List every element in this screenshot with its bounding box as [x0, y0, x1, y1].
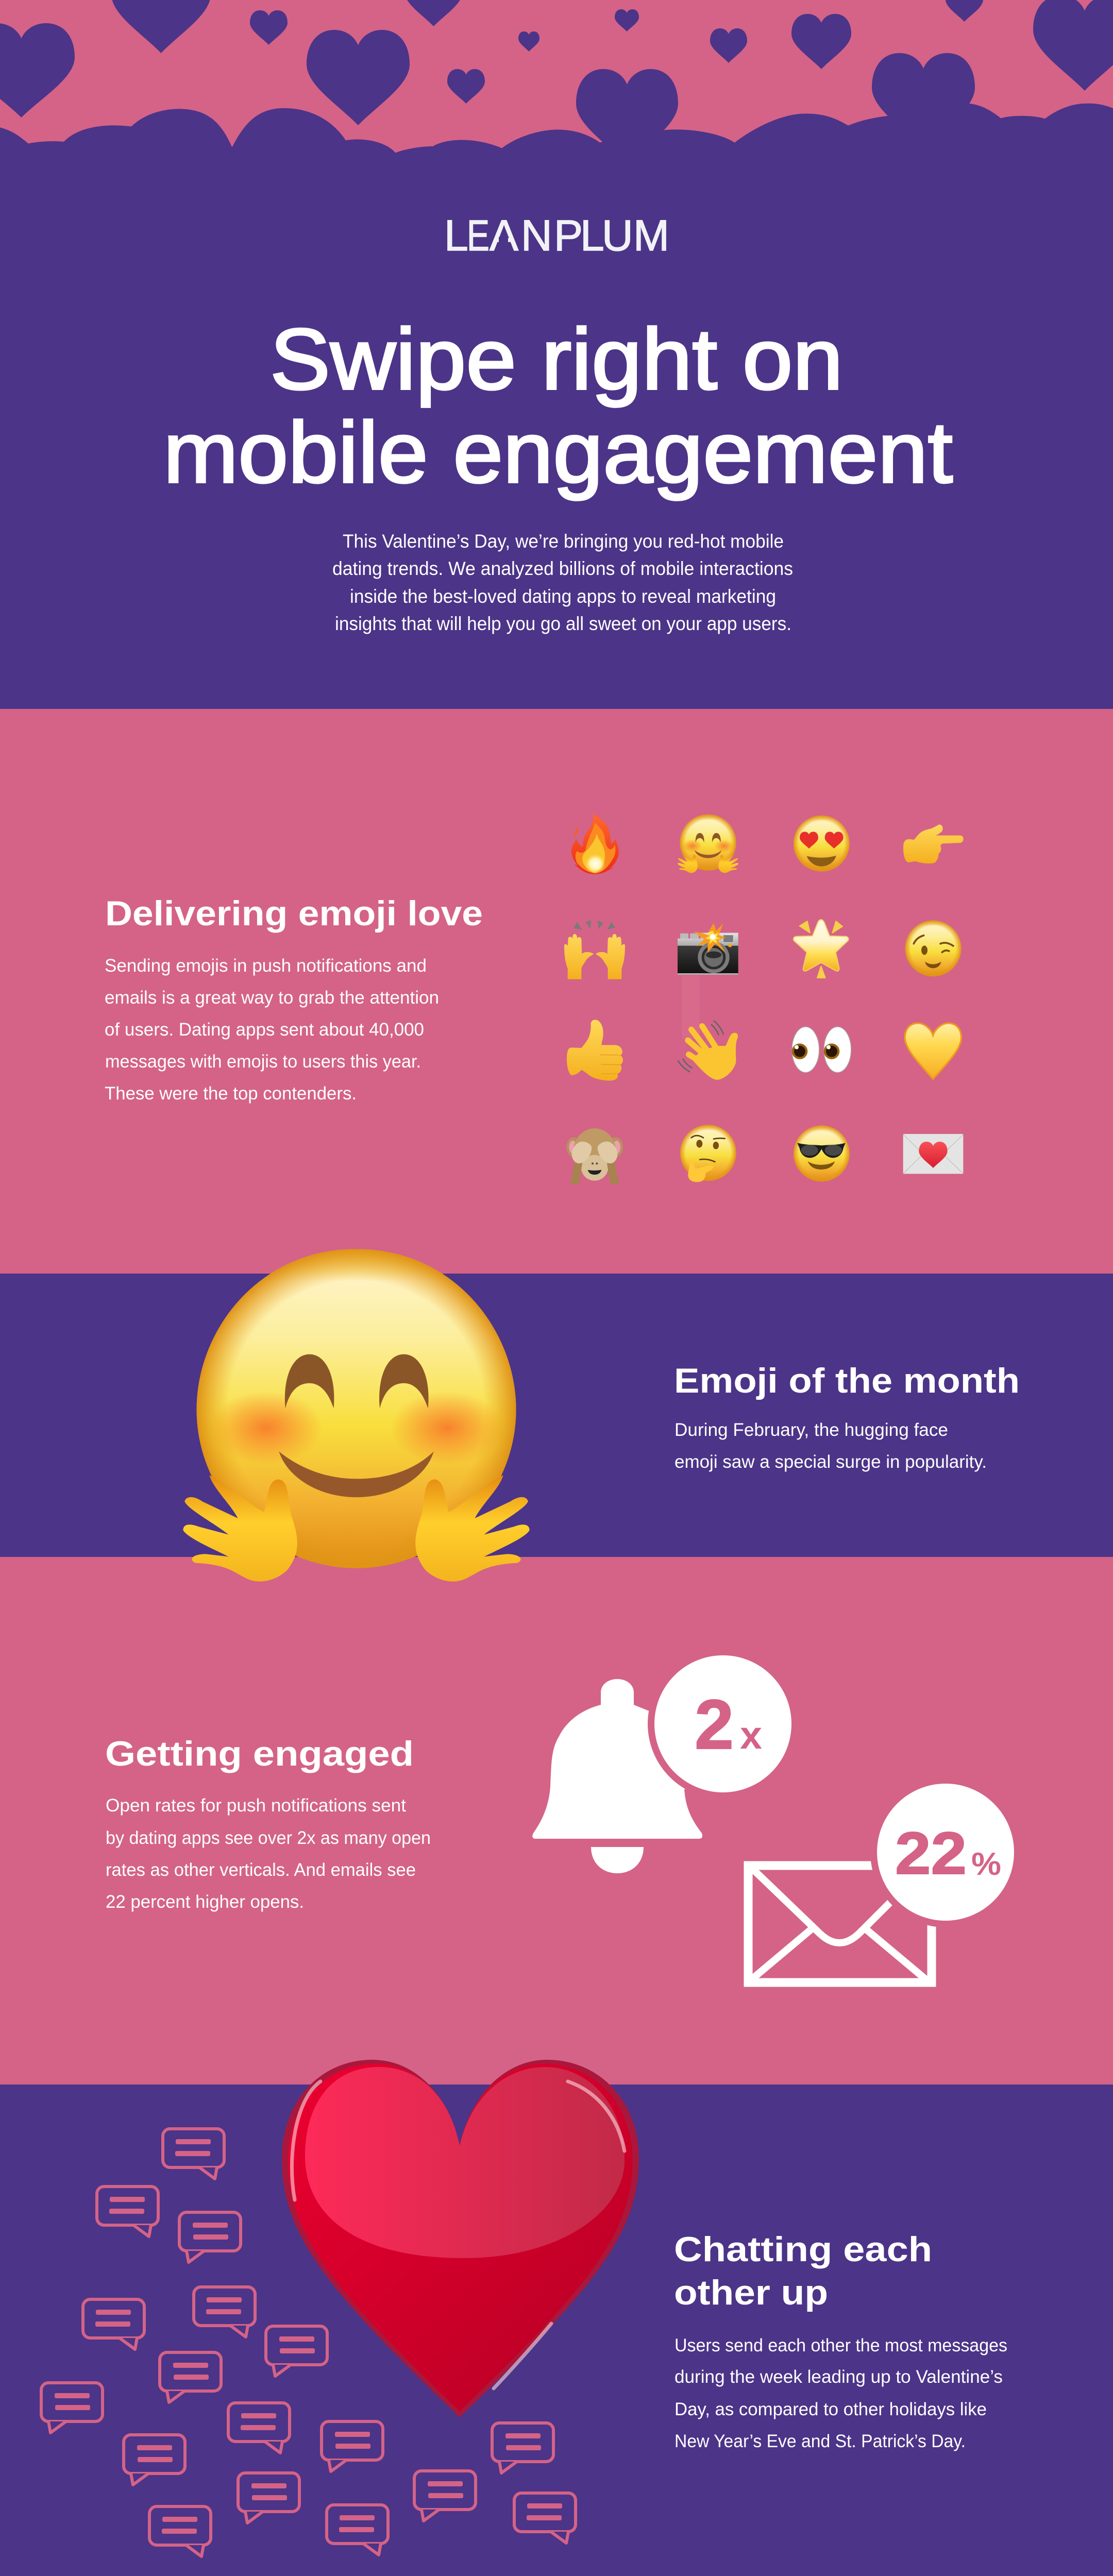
logo: L	[444, 211, 468, 260]
icon: waving hand	[678, 1021, 738, 1080]
heading: emoji of the month: Emoji of the month	[674, 1361, 1020, 1400]
body text	[105, 956, 439, 1104]
logo	[444, 211, 669, 260]
intro text: dating trends. We analyzed billions of mobile interactions	[332, 558, 793, 579]
logo: L	[580, 211, 604, 260]
body text: These were the top contenders.	[105, 1083, 357, 1104]
body text	[674, 2335, 1007, 2451]
body text: during the week leading up to Valentine’s	[674, 2367, 1003, 2387]
body text: by dating apps see over 2x as many open	[106, 1828, 431, 1848]
body text: Sending emojis in push notifications and	[105, 956, 427, 976]
title	[163, 311, 953, 501]
intro text: inside the best-loved dating apps to reveal marketing	[350, 586, 776, 607]
icon: heart eyes face	[794, 816, 850, 872]
icon: glowing star	[794, 920, 849, 978]
icon: large red heart	[282, 2060, 639, 2417]
icon: bell with 2x: x	[740, 1714, 762, 1757]
icon: camera with flash	[678, 922, 738, 975]
title: mobile engagement	[163, 404, 953, 501]
icon: envelope with 22%: 22	[895, 1820, 967, 1887]
icon: pointing hand	[903, 825, 964, 863]
body text: of users. Dating apps sent about 40,000	[105, 1020, 424, 1040]
purple cloud band	[0, 104, 1113, 709]
icon: sunglasses face	[794, 1126, 850, 1181]
body text: messages with emojis to users this year.	[105, 1052, 421, 1072]
icon: thumbs up	[567, 1020, 623, 1081]
logo: N	[521, 211, 552, 260]
icon: winking face	[905, 921, 961, 976]
heading: chatting each other up	[674, 2230, 932, 2312]
heading: chatting each other up: other up	[674, 2273, 828, 2312]
logo: A	[490, 211, 518, 260]
intro text	[332, 531, 793, 634]
logo: M	[633, 211, 669, 260]
logo: E	[467, 211, 490, 260]
body text: rates as other verticals. And emails see	[106, 1860, 416, 1880]
icon: envelope with 22%: %	[971, 1846, 1001, 1882]
message bubbles	[41, 2129, 576, 2556]
body text: emoji saw a special surge in popularity.	[674, 1452, 987, 1472]
body text: New Year’s Eve and St. Patrick’s Day.	[674, 2431, 966, 2451]
emoji grid	[564, 813, 964, 1184]
panel: delivering emoji love	[0, 709, 1113, 1274]
icon: envelope with 22%	[748, 1777, 1021, 1982]
intro text: This Valentine’s Day, we’re bringing you red-hot mobile	[343, 531, 784, 552]
body text: During February, the hugging face	[674, 1420, 948, 1440]
body text	[674, 1420, 987, 1472]
panel: emoji of the month	[0, 1274, 1113, 1557]
icon: yellow heart	[905, 1023, 962, 1079]
icon: monkey covering eyes	[566, 1128, 623, 1184]
icon: bell with 2x	[532, 1649, 798, 1873]
body text: 22 percent higher opens.	[106, 1892, 304, 1912]
icon: bell with 2x: 2	[695, 1685, 734, 1764]
icon: thinking face	[680, 1125, 736, 1182]
panel: header	[0, 0, 1113, 709]
decorative hearts	[0, 0, 1113, 164]
panel: chatting each other up	[0, 2084, 1113, 2576]
body text: Users send each other the most messages	[674, 2335, 1007, 2355]
logo: P	[554, 211, 583, 260]
panel: getting engaged	[0, 1557, 1113, 2084]
icon: love letter	[903, 1134, 963, 1174]
logo: U	[602, 211, 633, 260]
icon: eyes	[792, 1027, 851, 1073]
heading: chatting each other up: Chatting each	[674, 2230, 932, 2269]
icon: raised hands	[564, 920, 625, 979]
icon: hugging face	[678, 815, 738, 873]
title: Swipe right on	[270, 311, 843, 408]
icon: large hugging face emoji	[183, 1249, 530, 1582]
body text: Day, as compared to other holidays like	[674, 2399, 987, 2419]
icon: fire	[571, 813, 619, 874]
heading: delivering emoji love: Delivering emoji love	[105, 894, 483, 933]
body text	[106, 1795, 431, 1912]
intro text: insights that will help you go all sweet on your app users.	[335, 613, 791, 634]
heading: getting engaged: Getting engaged	[105, 1734, 414, 1773]
body text: Open rates for push notifications sent	[106, 1795, 406, 1816]
body text: emails is a great way to grab the attention	[105, 988, 439, 1008]
